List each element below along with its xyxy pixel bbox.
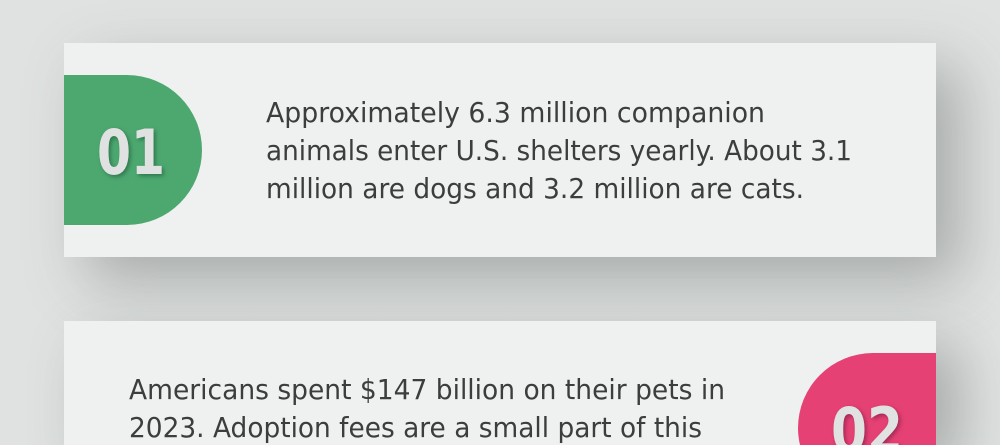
panel: card 02 <box>64 321 936 445</box>
text block: shelter intake: million are dogs and 3.2 million are cats. <box>266 173 804 205</box>
text block: pet spending <box>129 374 725 444</box>
text block: shelter intake: Approximately 6.3 million companion <box>266 97 765 129</box>
text block: shelter intake: animals enter U.S. shelters yearly. About 3.1 <box>266 135 852 167</box>
badge: 01 <box>64 75 202 225</box>
panel: card 01 <box>64 43 936 257</box>
text block: pet spending: 2023. Adoption fees are a small part of this <box>129 412 702 444</box>
text block: pet spending: Americans spent $147 billion on their pets in <box>129 374 725 406</box>
text block: shelter intake <box>266 97 852 205</box>
number 01: 01 <box>97 116 165 189</box>
badge: 02 <box>798 353 936 445</box>
